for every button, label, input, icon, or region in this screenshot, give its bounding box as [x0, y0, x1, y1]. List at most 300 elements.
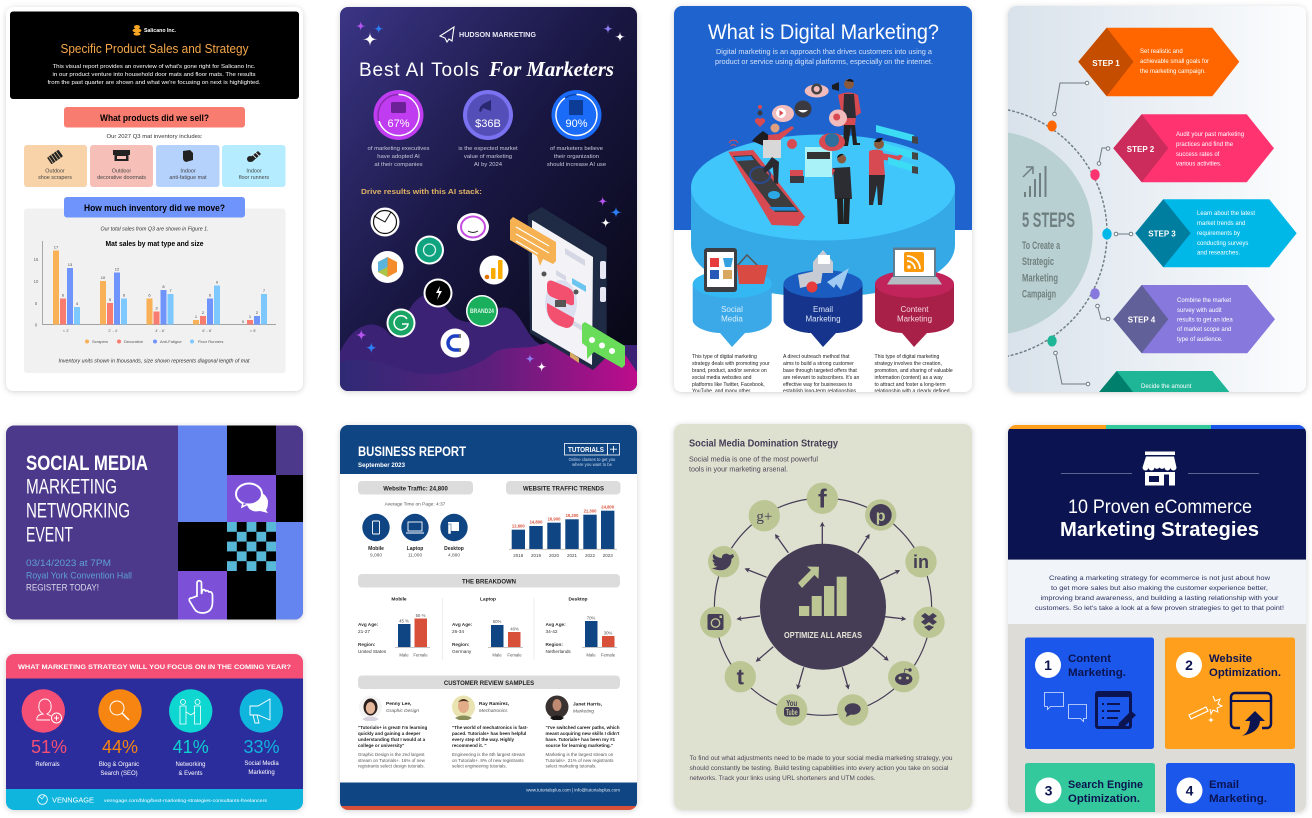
panel: ecommerce marketing strategies: [1008, 425, 1306, 818]
bar chart: mat sales by type and size: 7: [263, 288, 266, 293]
icon: twitter: [708, 546, 739, 577]
breakdown: desktop: 30%: [604, 630, 612, 636]
bar chart: traffic trends: 12,600: [512, 524, 525, 528]
arc dots: [1047, 120, 1112, 346]
heading: 5 steps: 5 STEPS: [1022, 209, 1075, 232]
breakdown: desktop: 34-42: [546, 629, 558, 634]
review: Ray Ramirez: paced. Tutorials+ has been helpful: [452, 731, 526, 736]
card 2: website optimization: Optimization.: [1209, 667, 1281, 679]
breakdown: mobile: 21-27: [358, 629, 370, 634]
stat: networking and events: Networking: [175, 762, 206, 768]
panel: social media domination strategy: [674, 424, 972, 810]
illustration: phone with robot: [510, 207, 625, 370]
card: outdoor shoe scrapers: shoe scrapers: [38, 175, 72, 181]
card 3: search engine optimization: Search Engine: [1068, 779, 1143, 791]
heading: customer review samples: CUSTOMER REVIEW SAMPLES: [444, 681, 534, 687]
brand name: HUDSON MARKETING: [459, 30, 536, 39]
man at screen: [821, 154, 852, 224]
icon: laptop with RSS: [887, 248, 942, 284]
step 1: Set realistic and: [1140, 49, 1183, 55]
breakdown: desktop: Male: [586, 652, 596, 658]
title: What is Digital Marketing?: [708, 20, 939, 44]
intro band: Creating a marketing strategy for ecommerce is not just about how: [1049, 575, 1270, 582]
bar chart: mat sales by type and size: 2' - 4': [108, 328, 118, 333]
device stat: mobile: Mobile: [368, 546, 384, 552]
event details: 03/14/2023 at 7PM: [26, 558, 111, 569]
stat caption 2: is the expected market: [458, 146, 518, 152]
footer: VENNGAGE: [52, 796, 94, 804]
chart legend: Floor Runners: [198, 339, 223, 344]
title: Best AI Tools: [359, 60, 479, 81]
device stat: mobile: 9,080: [370, 552, 382, 558]
card: outdoor shoe scrapers: Outdoor: [45, 168, 65, 174]
step 1: STEP 1: [1092, 59, 1120, 68]
icon: envelopes and plane: [798, 250, 849, 292]
intro band: to get more sales but also making the customer experience better,: [1051, 585, 1268, 592]
subtitle: product or service using digital platforms, especially on the internet.: [715, 59, 933, 66]
chart legend: Decorative: [124, 339, 144, 344]
step 1: achievable small goals for: [1140, 59, 1209, 65]
column body text: strategy involves the creation,: [874, 361, 942, 367]
bar chart: traffic trends: 2023: [603, 553, 613, 558]
intro band: [1008, 560, 1306, 624]
stat: referrals: Referrals: [35, 762, 60, 768]
intro band: improving brand awareness, and building a lasting relationship with your: [1040, 595, 1279, 602]
card 4: email marketing: Marketing.: [1209, 793, 1267, 805]
device stat: laptop: Laptop: [407, 546, 423, 552]
step 2: practices and find the: [1176, 142, 1234, 148]
report footer: www.tutorialsplus.com | info@tutorialsplus.com: [526, 788, 620, 792]
icon: Brand24: BRAND24: [470, 308, 494, 315]
heading: how much inventory did we move: [64, 197, 245, 218]
title: Social Media Domination Strategy: [689, 438, 838, 450]
body text: To find out what adjustments need to be made to your social media marketing strategy, you: [690, 755, 953, 762]
label: Content: [900, 305, 929, 314]
bar chart: mat sales by type and size: 5: [35, 301, 38, 306]
step 5: Decide the amount: [1141, 384, 1192, 390]
panel: what is digital marketing: [674, 6, 972, 394]
review: Ray Ramirez: on Tutorials+. 8% of new registrants: [452, 758, 524, 763]
review: Penny Lee: Penny Lee,: [386, 701, 412, 707]
device stat: desktop: Desktop: [444, 546, 464, 552]
bar chart: mat sales by type and size: 15: [34, 257, 39, 262]
bar chart: traffic trends: 2020: [549, 553, 560, 558]
report header: [10, 12, 299, 99]
icon: chat bubbles: [227, 475, 276, 522]
card 3: search engine optimization: Optimization.: [1068, 793, 1140, 805]
label: Marketing: [805, 314, 841, 324]
robot character: [542, 272, 578, 328]
review: Ray Ramirez: Engineering is the 6th largest stream: [452, 752, 526, 757]
step 3: [1135, 199, 1297, 267]
step 1: [1078, 28, 1239, 96]
column body text: This type of digital marketing: [874, 354, 940, 360]
subheading: [1022, 240, 1061, 300]
woman with hair: [752, 124, 794, 184]
stat: blog and organic search: Blog & Organic: [99, 762, 139, 768]
stat: social media marketing: Social Media: [244, 761, 279, 767]
phone: [728, 150, 805, 226]
icon: magnet: [440, 328, 470, 358]
stat: networking and events: & Events: [178, 771, 203, 777]
event title: EVENT: [26, 524, 73, 546]
bar chart: traffic trends: 24,800: [601, 504, 615, 510]
bar chart: traffic trends: [509, 504, 617, 558]
dotted arc: [855, 107, 1107, 359]
figure intro: Our total sales from Q3 are shown in Figure 1.: [100, 226, 208, 232]
review: Janet Harris: meant acquiring new skills I didn't: [546, 731, 620, 736]
heading: website traffic: [358, 481, 473, 494]
label: Social: [721, 305, 743, 314]
chart legend: Scrapers: [92, 339, 108, 344]
card 1: content marketing: [1025, 638, 1154, 749]
intro text: from the past quarter are shown and what we're focusing on next is highlighted.: [48, 80, 261, 86]
bar chart: mat sales by type and size: 2: [256, 310, 259, 315]
bar chart: mat sales by type and size: 4: [76, 301, 79, 306]
label: [897, 305, 932, 324]
breakdown: laptop: Germany: [452, 649, 472, 654]
icon: rising bars: [1023, 166, 1046, 197]
chat bubble yellow: [510, 217, 556, 266]
breakdown: desktop: Region:: [546, 642, 563, 647]
column: email marketing: [784, 250, 862, 347]
review: Janet Harris: [546, 696, 620, 768]
pink header: WHAT MARKETING STRATEGY WILL YOU FOCUS ON IN THE COMING YEAR?: [18, 664, 291, 671]
intro: Social media is one of the most powerful: [689, 456, 818, 464]
column body text: information (content) as a way: [874, 375, 943, 381]
breakdown: laptop: Avg Age:: [452, 622, 473, 627]
column body text: effective way for businesses to: [783, 382, 852, 388]
stat caption 2: AI by 2024: [474, 162, 503, 168]
bar chart: mat sales by type and size: 6: [62, 292, 65, 298]
breakdown: laptop: 60%: [493, 619, 501, 624]
tutorials logo: where you want to be: [572, 462, 613, 467]
column body text: strategy deals with promoting your: [692, 361, 770, 367]
company name: Salicano Inc.: [144, 28, 176, 34]
label: Email: [813, 305, 833, 314]
big blue platform: [691, 134, 955, 297]
stat: 36 billion: [463, 90, 513, 140]
stat: networking and events: [169, 689, 212, 777]
column body text: social media websites and: [692, 375, 752, 381]
icon: storefront: [1142, 452, 1176, 486]
breakdown: desktop: Avg Age:: [546, 622, 566, 627]
review: Ray Ramirez: Ray Ramirez,: [479, 701, 510, 707]
bar chart: mat sales by type and size: 9: [216, 280, 219, 284]
breakdown: desktop: 70%: [587, 616, 595, 620]
device stat: laptop: [401, 514, 429, 558]
review: Janet Harris: Marketing: [573, 708, 594, 714]
body text: [690, 755, 953, 782]
chart legend: Anti-Fatigue: [160, 339, 182, 344]
intro: [689, 456, 818, 474]
stat: social media marketing: [240, 689, 283, 776]
review: Janet Harris: Janet Harris,: [573, 702, 603, 708]
icon: magic wand and browser: [1189, 693, 1271, 736]
review: Janet Harris: Tutorials+. 21% of new registrants: [546, 758, 614, 763]
bar chart: mat sales by type and size: 10: [101, 275, 106, 280]
label: Marketing: [897, 314, 932, 324]
breakdown: laptop: Female: [507, 652, 522, 658]
illustration: marketing people and icons: [728, 79, 918, 226]
review: Penny Lee: Graphic Design is the 2nd largest: [358, 752, 425, 757]
pink header: [6, 654, 303, 678]
inventory intro: Our 2027 Q3 mat inventory includes:: [106, 134, 202, 140]
card: indoor anti-fatigue mat: Indoor: [180, 168, 196, 174]
stat: social media marketing: Marketing: [248, 770, 275, 776]
icon: beehive logo: [132, 25, 142, 36]
bar chart: mat sales by type and size: 0: [242, 319, 245, 324]
footer: venngage.com/blog/best-marketing-strategies-consultants-freelancers: [104, 798, 268, 804]
bar chart: mat sales by type and size: 2: [202, 310, 205, 315]
step 4: of market scope and: [1177, 327, 1231, 333]
stat: 90 percent: [552, 90, 602, 140]
event title: SOCIAL MEDIA: [26, 452, 148, 475]
average time: Average Time on Page: 4:37: [385, 502, 446, 508]
bar chart: traffic trends: 21,300: [584, 508, 597, 514]
review: Janet Harris: select marketing tutorials.: [546, 764, 597, 768]
event details: [26, 558, 132, 594]
bar chart: traffic trends: 2021: [567, 553, 578, 558]
step 2: [1113, 114, 1274, 182]
step 2: STEP 2: [1127, 145, 1155, 154]
stat: blog and organic search: Search (SEO): [100, 771, 138, 777]
bar chart: traffic trends: 2022: [585, 553, 596, 558]
column body text: brand, product, and/or service on: [692, 368, 767, 374]
footer: [6, 789, 303, 810]
breakdown: mobile: Avg Age:: [358, 622, 379, 627]
breakdown: mobile: United States: [358, 649, 387, 654]
stat: referrals: [22, 689, 67, 768]
checker block: [227, 522, 276, 571]
bar chart: mat sales by type and size: 4' - 6': [155, 328, 165, 333]
icon: pinterest: [865, 499, 896, 531]
step 4: STEP 4: [1128, 316, 1156, 324]
device stat: desktop: 4,880: [448, 552, 460, 558]
navy header: [1008, 429, 1306, 560]
event details: REGISTER TODAY!: [26, 582, 99, 594]
column body text: This type of digital marketing: [692, 354, 757, 360]
stat: 67 percent: [374, 90, 424, 140]
review: Penny Lee: college or university": [358, 743, 404, 748]
breakdown: mobile: Region:: [358, 642, 376, 647]
step 1: the marketing campaign.: [1140, 69, 1206, 75]
breakdown: mobile: 45 %: [399, 618, 409, 624]
stat caption 3: of marketers believe: [550, 146, 604, 152]
stat caption 1: [368, 146, 429, 168]
intro band: customers. So let's take a look at a few proven strategies to get to that point!: [1035, 605, 1284, 612]
tutorials logo: [564, 444, 620, 467]
breakdown: desktop: Female: [601, 652, 616, 658]
review: Janet Harris: source for learning marketing.": [546, 743, 613, 748]
icon: analytics bars: [480, 256, 508, 284]
heading: website traffic: Website Traffic: 24,800: [383, 486, 448, 492]
title: [360, 62, 614, 76]
report footer: [340, 782, 637, 810]
stat caption 2: value of marketing: [464, 154, 512, 160]
stat: social media marketing: 33%: [243, 737, 280, 757]
bar chart: mat sales by type and size: 13: [68, 262, 73, 267]
breakdown: laptop: 26-34: [452, 629, 464, 634]
card 4: email marketing: 4: [1186, 782, 1194, 798]
label: Media: [721, 314, 743, 324]
panel: Salicano product sales report: [6, 7, 303, 391]
icon: facebook: [807, 483, 838, 514]
breakdown: mobile: 55 %: [416, 613, 426, 618]
stat: 67 percent: 67%: [387, 118, 410, 130]
report title: Specific Product Sales and Strategy: [60, 41, 249, 56]
breakdown: desktop: Netherlands: [546, 649, 571, 654]
stat: 36 billion: $36B: [475, 118, 501, 130]
report header: September 2023: [358, 462, 405, 469]
icon: Grammarly: [386, 308, 416, 338]
review: Ray Ramirez: "The world of mechatronics is fast-: [452, 725, 528, 730]
review: Janet Harris: have. Tutorials+ has been my #1: [546, 737, 616, 742]
step 4: type of audience.: [1177, 337, 1223, 343]
review: Penny Lee: [358, 696, 427, 768]
purple hills: [340, 295, 637, 391]
step 3: requirements by: [1197, 231, 1240, 237]
event title: MARKETING: [26, 476, 117, 498]
breakdown: laptop: Male: [492, 652, 502, 658]
bar chart: mat sales by type and size: 6' - 8': [202, 328, 212, 333]
breakdown: laptop: Region:: [452, 642, 470, 647]
panel: marketing strategy survey: [6, 654, 303, 810]
bar chart: traffic trends: 2019: [531, 553, 542, 558]
title: 10 Proven eCommerce: [1068, 497, 1252, 518]
stat caption 2: [458, 146, 518, 168]
heading: customer review samples: [358, 676, 620, 689]
stat caption 1: of marketing executives: [368, 146, 429, 152]
man with megaphone: [832, 79, 861, 146]
panel: business report: [340, 425, 637, 810]
breakdown: laptop: [452, 596, 523, 658]
step 4: results to get an idea: [1177, 318, 1233, 324]
icon: facebook: f: [818, 484, 827, 514]
breakdown: mobile: Female: [413, 652, 428, 658]
column body text: aims to build a strong customer: [783, 361, 854, 367]
review: Penny Lee: registrants select design tutorials.: [358, 764, 425, 768]
review: Janet Harris: Marketing is the largest stream on: [546, 752, 614, 757]
card: outdoor decorative doormats: decorative doormats: [97, 175, 146, 181]
panel: 5 steps marketing campaign: [855, 6, 1306, 410]
column: content marketing: [875, 248, 954, 347]
stat caption 3: should increase AI use: [547, 162, 607, 168]
central circle: OPTIMIZE ALL AREAS: [784, 630, 862, 640]
intro text: [48, 64, 261, 86]
bar chart: mat sales by type and size: 0: [35, 322, 38, 328]
icon: tumblr: t: [737, 664, 745, 690]
device stat: mobile: [362, 514, 390, 558]
step 2: success rates of: [1176, 152, 1220, 158]
card 3: search engine optimization: 3: [1045, 782, 1053, 798]
stat caption 3: [547, 146, 606, 166]
colour block grid: [178, 425, 303, 620]
breakdown: desktop: [546, 596, 617, 658]
panel: social media networking event: [6, 425, 303, 620]
speech bubbles: [805, 84, 829, 98]
intro text: This visual report provides an overview of what's gone right for Salicano Inc.: [52, 64, 256, 70]
icon: chat bubbles and document: [1044, 691, 1136, 729]
body text: networks. Track your links using URL shorteners and UTM codes.: [690, 775, 876, 782]
icon: reddit: [888, 661, 919, 692]
bar chart: mat sales by type and size: 7: [169, 288, 172, 293]
stack heading: Drive results with this AI stack:: [361, 189, 482, 196]
step 3: market trends and: [1197, 221, 1245, 227]
icon: dropbox: [913, 607, 945, 638]
icon: youtube: Tube: [786, 708, 798, 717]
bar chart: mat sales by type and size: 6: [123, 292, 126, 298]
event details: Royal York Convention Hall: [26, 570, 132, 582]
column body text: to attract and foster a long-term: [874, 382, 946, 388]
step 5: [1088, 371, 1240, 410]
ring: [714, 498, 932, 715]
colour stripe: [1008, 425, 1306, 430]
stat caption 1: have adopted AI: [377, 154, 420, 160]
bar chart: mat sales by type and size: 6: [209, 292, 212, 298]
tutorials logo: Online classes to get you: [569, 457, 616, 462]
navy header: Marketing Strategies: [1060, 518, 1259, 541]
icon: hexagon tool: [372, 251, 404, 283]
column body text: relationship with a clearly defined: [874, 388, 950, 394]
icon: chat: [837, 694, 868, 726]
stat: 90 percent: 90%: [565, 118, 588, 130]
review: Ray Ramirez: recommend it. ": [452, 743, 486, 748]
man at panels: [869, 138, 905, 205]
breakdown: laptop: Laptop: [480, 596, 496, 602]
bar chart: mat sales by type and size: 8: [162, 284, 165, 289]
review: Janet Harris: "I've switched career paths, which: [546, 725, 620, 730]
bar chart: mat sales by type and size: 10: [34, 279, 39, 284]
bar chart: mat sales by type and size: 6: [148, 292, 151, 298]
bar chart: mat sales by type and size: Mat sales by mat type and size: [106, 241, 204, 248]
stat caption 3: their organization: [554, 154, 599, 160]
step 2: Audit your past marketing: [1176, 132, 1244, 138]
column: social media: [693, 248, 772, 347]
card 1: content marketing: Marketing.: [1068, 667, 1126, 679]
card 1: content marketing: 1: [1044, 657, 1052, 673]
stat: networking and events: 41%: [173, 737, 209, 757]
intro text: in our product venture into household door mats and floor mats. The results: [52, 72, 256, 78]
event title: [26, 452, 148, 546]
icon: clock tool: [370, 208, 400, 236]
icon: social tablet and basket: [704, 248, 768, 292]
column body text: [692, 354, 953, 394]
step 3: Learn about the latest: [1197, 211, 1255, 217]
bar chart: mat sales by type and size: 1: [195, 314, 198, 319]
review: Penny Lee: Graphic Design: [386, 708, 419, 714]
icon: ChatGPT: [415, 236, 444, 264]
review: Ray Ramirez: Mechatronics: [479, 708, 508, 714]
heading: how much inventory did we move: How much inventory did we move?: [84, 203, 225, 214]
icon: Jasper face: [457, 213, 489, 241]
subheading: To Create a: [1022, 240, 1061, 252]
bar chart: mat sales by type and size: 3: [155, 306, 158, 310]
card 2: website optimization: 2: [1185, 657, 1193, 673]
bar chart: traffic trends: 2018: [513, 553, 524, 558]
bar chart: mat sales by type and size: < 2': [63, 328, 69, 333]
breakdown: mobile: Mobile: [391, 596, 407, 602]
icon: linkedin: [905, 546, 937, 577]
icon: youtube: [776, 694, 807, 726]
step connectors: [1053, 81, 1133, 386]
hearts: [755, 118, 765, 127]
subheading: Marketing: [1022, 272, 1058, 284]
body text: should constantly be testing. Build testing capabilities into every action you take on social: [690, 765, 949, 772]
stat: blog and organic search: 44%: [102, 737, 138, 757]
review: Ray Ramirez: every step of the way. Highly: [452, 737, 515, 742]
icon: tumblr: [725, 661, 756, 692]
